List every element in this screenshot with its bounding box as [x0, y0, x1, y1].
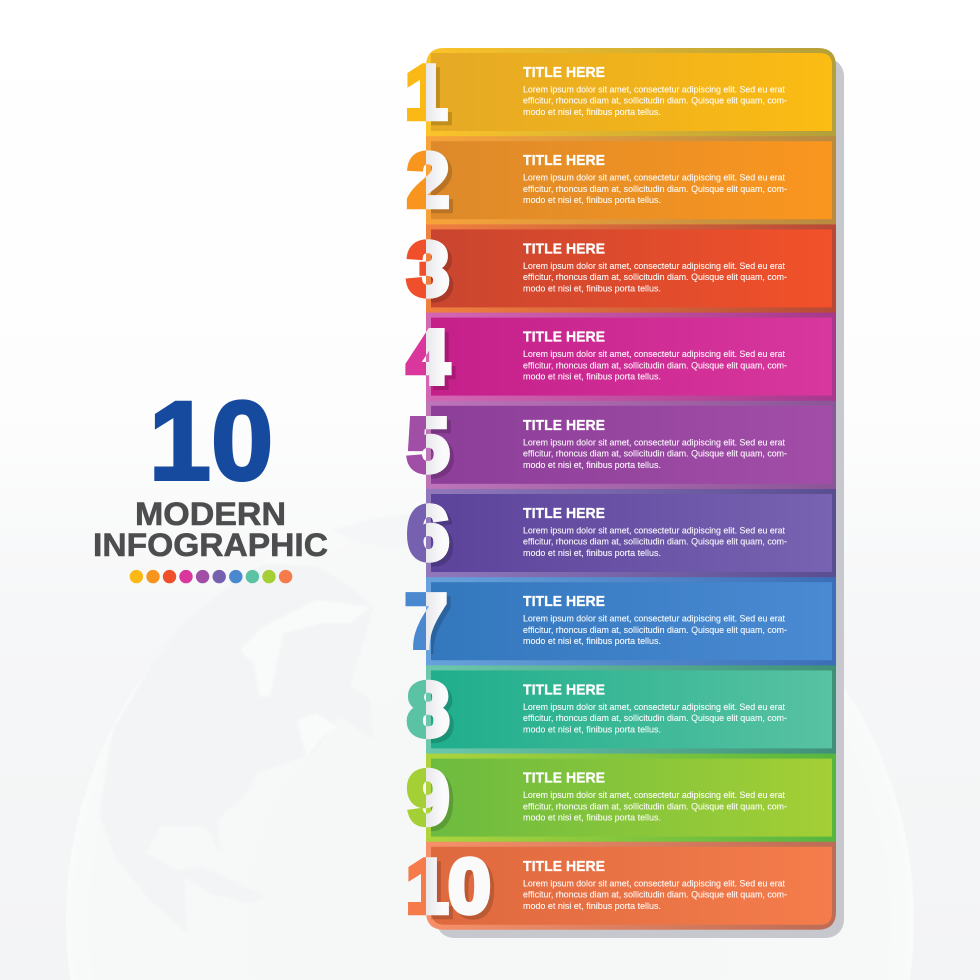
row 4 — [407, 313, 836, 404]
row 3 number — [406, 239, 454, 303]
row 9 number: 9 — [411, 760, 453, 845]
row 10 number: 10 — [410, 848, 495, 933]
row 6 number: 6 — [407, 492, 449, 576]
row 8 title: TITLE HERE — [523, 682, 605, 698]
row 3 text: Lorem ipsum dolor sit amet, consectetur adipiscing elit. Sed eu erat — [523, 260, 785, 271]
row 10 number: 10 — [406, 844, 491, 929]
row 1 number: 1 — [409, 54, 451, 140]
row 6 band — [426, 489, 836, 578]
row 3 number: 3 — [411, 231, 453, 316]
row 8 number — [406, 680, 454, 744]
card drop shadow — [436, 58, 844, 938]
row 2 panel — [431, 141, 832, 219]
row 2 text: modo et nisi et, finibus porta tellus. — [523, 194, 661, 205]
row 7 title: TITLE HERE — [523, 594, 605, 610]
row 5 text: Lorem ipsum dolor sit amet, consectetur adipiscing elit. Sed eu erat — [523, 436, 785, 447]
row 2 text: efficitur, rhoncus diam at, sollicitudin diam. Quisque elit quam, com- — [523, 183, 787, 194]
row 4 text: efficitur, rhoncus diam at, sollicitudin diam. Quisque elit quam, com- — [523, 359, 787, 370]
row 5 title: TITLE HERE — [523, 418, 605, 434]
row 5 — [407, 401, 836, 492]
row 3 text — [523, 260, 787, 293]
row 8 text: modo et nisi et, finibus porta tellus. — [523, 723, 661, 734]
row 5 number: 5 — [411, 407, 453, 492]
row 1 — [405, 48, 836, 140]
row 7 text: modo et nisi et, finibus porta tellus. — [523, 635, 661, 646]
row 3 title: TITLE HERE — [523, 241, 605, 257]
row 2 text: Lorem ipsum dolor sit amet, consectetur adipiscing elit. Sed eu erat — [523, 172, 785, 183]
row 2 number — [406, 150, 453, 214]
heading: modern: MODERN — [135, 496, 286, 532]
background globe — [66, 496, 914, 980]
row 8 band — [426, 665, 836, 754]
row 10 — [406, 842, 836, 933]
row 1 number: 1 — [405, 50, 447, 136]
row 5 text: modo et nisi et, finibus porta tellus. — [523, 459, 661, 470]
row 8 number: 8 — [407, 668, 449, 753]
row 10 text: efficitur, rhoncus diam at, sollicitudin diam. Quisque elit quam, com- — [523, 888, 787, 899]
row 4 text: modo et nisi et, finibus porta tellus. — [523, 371, 661, 382]
row 5 text: efficitur, rhoncus diam at, sollicitudin diam. Quisque elit quam, com- — [523, 447, 787, 458]
row 4 text: Lorem ipsum dolor sit amet, consectetur adipiscing elit. Sed eu erat — [523, 348, 785, 359]
row 8 text — [523, 701, 787, 734]
heading: large 10: 10 — [149, 378, 273, 504]
row 10 text: modo et nisi et, finibus porta tellus. — [523, 900, 661, 911]
row 1 text: modo et nisi et, finibus porta tellus. — [523, 106, 661, 117]
row 7 text: Lorem ipsum dolor sit amet, consectetur adipiscing elit. Sed eu erat — [523, 613, 785, 624]
row 6 title: TITLE HERE — [523, 506, 605, 522]
row 6 text: modo et nisi et, finibus porta tellus. — [523, 547, 661, 558]
heading: infographic: INFOGRAPHIC — [93, 527, 328, 563]
row 1 text — [523, 84, 787, 117]
row 9 text — [523, 789, 787, 823]
row 10 panel — [431, 847, 832, 925]
row 3 text: modo et nisi et, finibus porta tellus. — [523, 282, 661, 293]
row 4 number: 4 — [411, 319, 453, 404]
row 3 — [407, 224, 836, 316]
row 8 — [407, 665, 836, 757]
row 1 panel — [431, 53, 832, 131]
row 7 number: 7 — [409, 584, 451, 669]
row 2 — [407, 136, 836, 228]
colour dots row — [130, 570, 292, 583]
row 9 text: Lorem ipsum dolor sit amet, consectetur adipiscing elit. Sed eu erat — [523, 789, 785, 800]
row 9 band — [426, 754, 836, 843]
row 10 band — [426, 842, 836, 930]
row 9 — [407, 754, 836, 845]
row 4 panel — [431, 318, 832, 396]
row 8 panel — [431, 670, 832, 748]
row 3 number: 3 — [407, 227, 449, 312]
row 6 text — [523, 524, 787, 558]
row 1 band — [426, 48, 836, 137]
row 4 number — [405, 328, 456, 390]
row 6 panel — [431, 494, 832, 572]
row 5 text — [523, 436, 787, 470]
row 8 text: Lorem ipsum dolor sit amet, consectetur adipiscing elit. Sed eu erat — [523, 701, 785, 712]
row 2 title: TITLE HERE — [523, 153, 605, 169]
row 10 text: Lorem ipsum dolor sit amet, consectetur adipiscing elit. Sed eu erat — [523, 877, 785, 888]
row 7 band — [426, 577, 836, 666]
row 4 number: 4 — [407, 315, 449, 400]
row 6 — [407, 489, 836, 580]
row 3 panel — [431, 229, 832, 307]
row 2 number: 2 — [407, 139, 449, 224]
row 6 text: Lorem ipsum dolor sit amet, consectetur adipiscing elit. Sed eu erat — [523, 524, 785, 536]
row 4 band — [426, 313, 836, 402]
row 10 title: TITLE HERE — [523, 859, 605, 875]
row 9 text: efficitur, rhoncus diam at, sollicitudin diam. Quisque elit quam, com- — [523, 800, 787, 811]
row 6 number: 6 — [411, 496, 453, 580]
row 3 band — [426, 224, 836, 313]
row 1 title: TITLE HERE — [523, 65, 605, 81]
row 7 — [405, 577, 836, 669]
row 2 number: 2 — [411, 143, 453, 228]
row 2 band — [426, 136, 836, 225]
row 5 number: 5 — [407, 403, 449, 488]
row 7 text: efficitur, rhoncus diam at, sollicitudin diam. Quisque elit quam, com- — [523, 624, 787, 635]
row 8 number: 8 — [411, 672, 453, 757]
row 1 text: efficitur, rhoncus diam at, sollicitudin diam. Quisque elit quam, com- — [523, 95, 787, 106]
row 7 panel — [431, 582, 832, 660]
row 9 title: TITLE HERE — [523, 771, 605, 787]
row 9 panel — [431, 759, 832, 837]
row 3 text: efficitur, rhoncus diam at, sollicitudin diam. Quisque elit quam, com- — [523, 271, 787, 282]
row 10 text — [523, 877, 787, 911]
row 7 number: 7 — [405, 580, 447, 665]
row 2 text — [523, 172, 787, 205]
row 4 text — [523, 348, 787, 382]
row 5 panel — [431, 406, 832, 484]
row 7 text — [523, 613, 787, 646]
row 5 band — [426, 401, 836, 490]
row 8 text: efficitur, rhoncus diam at, sollicitudin diam. Quisque elit quam, com- — [523, 712, 787, 723]
row 6 text: efficitur, rhoncus diam at, sollicitudin diam. Quisque elit quam, com- — [523, 536, 787, 547]
row 5 number — [406, 416, 454, 479]
row 9 text: modo et nisi et, finibus porta tellus. — [523, 812, 661, 823]
row 7 number — [406, 592, 451, 654]
row 1 text: Lorem ipsum dolor sit amet, consectetur adipiscing elit. Sed eu erat — [523, 84, 785, 94]
row 9 number: 9 — [407, 756, 449, 841]
row 9 number — [406, 768, 454, 832]
row 4 title: TITLE HERE — [523, 330, 605, 346]
